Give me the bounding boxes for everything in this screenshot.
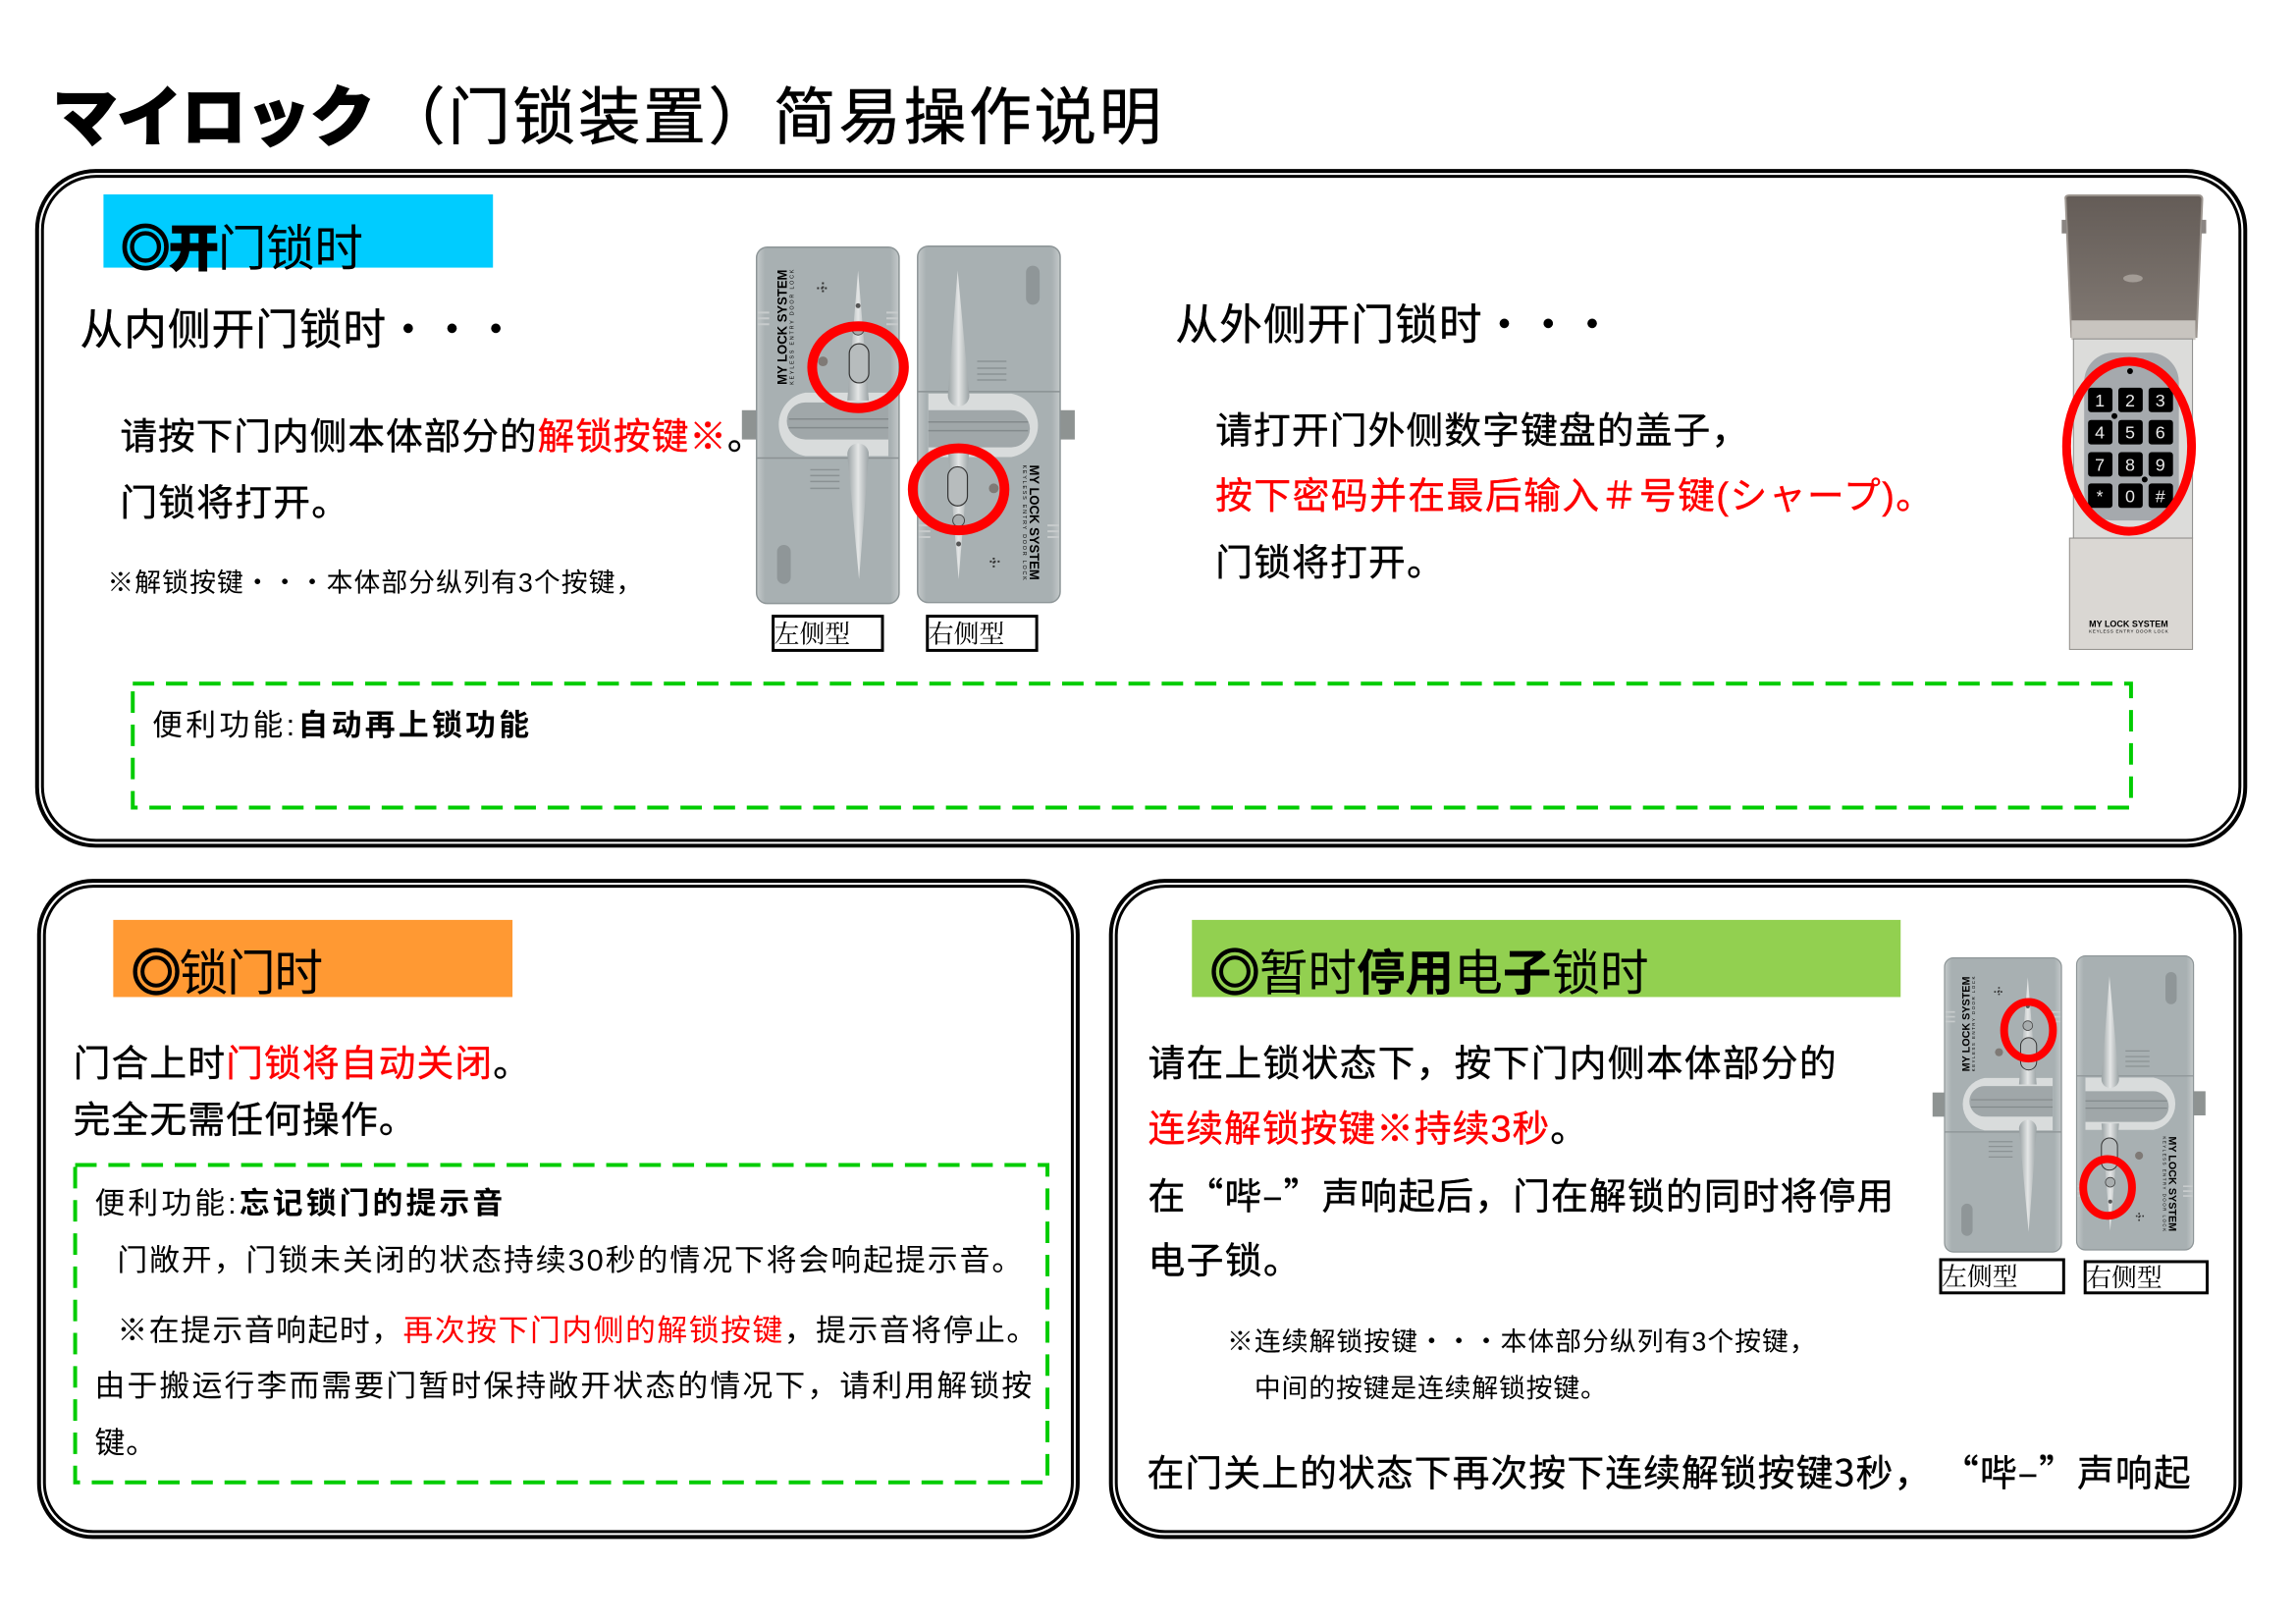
- keypad buttons: *: [2097, 486, 2104, 506]
- text: disable instructions: 电子锁。: [1148, 1241, 1301, 1282]
- callout: auto relock: [133, 683, 2131, 808]
- label: right type: 右侧型: [929, 620, 1004, 648]
- icon: right-hand lock: MY LOCK SYSTEM: [1027, 464, 1041, 580]
- icon: left-hand lock small: MY LOCK SYSTEM: [1960, 977, 1972, 1071]
- highlight: keypad: [2066, 361, 2192, 531]
- panel frame: [39, 881, 1078, 1537]
- highlight: right lock button: [913, 449, 1004, 530]
- label: right type small: 右侧型: [2086, 1264, 2163, 1292]
- title: （门锁装置）简易操作说明: [383, 82, 1161, 152]
- icon: keypad unit: MY LOCK SYSTEM: [2089, 620, 2168, 630]
- icon: right-hand lock small: MY LOCK SYSTEM: [2165, 1136, 2177, 1231]
- heading: lock: ◎锁门时: [132, 946, 323, 1001]
- panel frame: [37, 171, 2245, 845]
- callout: reminder tone: 由于搬运行李而需要门暂时保持敞开状态的情况下，请利用解锁按: [94, 1369, 1032, 1403]
- note: unlock key: ※解锁按键・・・本体部分纵列有3个按键，: [107, 568, 642, 598]
- icon: left-hand lock: KEYLESS ENTRY DOOR LOCK: [790, 269, 796, 385]
- keypad buttons: 9: [2156, 455, 2165, 474]
- icon: right-hand lock: KEYLESS ENTRY DOOR LOCK: [1021, 464, 1027, 580]
- heading: temporary disable: ◎暂时停用电子锁时: [1210, 946, 1649, 1001]
- heading: open: [103, 194, 493, 277]
- text: re-enable: 在门关上的状态下再次按下连续解锁按键3秒， “哔–”声响起: [1148, 1443, 2191, 1497]
- icon: left-hand lock: [742, 247, 899, 604]
- keypad buttons: [2088, 368, 2173, 508]
- panel frame: [1111, 881, 2240, 1537]
- note: continuous key: [1227, 1326, 1816, 1403]
- text: inside instructions: [120, 417, 765, 524]
- icon: keypad unit: KEYLESS ENTRY DOOR LOCK: [2089, 629, 2168, 634]
- title: マイロック: [53, 81, 375, 153]
- icon: right-hand lock: [918, 246, 1075, 603]
- text: outside instructions: 按下密码并在最后输入＃号键(シャープ)。: [1215, 476, 1933, 517]
- label: right type small: [2085, 1262, 2208, 1293]
- icon: right-hand lock small: [2077, 956, 2206, 1250]
- panel: locking: [39, 881, 1078, 1537]
- label: left type: [774, 617, 882, 650]
- text: disable instructions: 请在上锁状态下，按下门内侧本体部分的: [1148, 1044, 1837, 1085]
- keypad buttons: 3: [2156, 391, 2165, 410]
- text: auto lock: [74, 1044, 530, 1142]
- icon: keypad unit: [2061, 195, 2207, 649]
- highlight: left lock button: [812, 326, 904, 408]
- highlight: right small lock button: [2083, 1160, 2132, 1216]
- keypad buttons: 7: [2095, 455, 2105, 474]
- heading: open: ◎开门锁时: [121, 222, 363, 277]
- callout: reminder tone: 键。: [94, 1426, 156, 1460]
- label: left type small: 左侧型: [1942, 1263, 2018, 1291]
- label: right type: [928, 617, 1037, 650]
- heading: temporary disable: [1192, 920, 1900, 1001]
- text: disable instructions: [1148, 1044, 1894, 1282]
- text: inside instructions: 请按下门内侧本体部分的解锁按键※。: [120, 417, 765, 459]
- subheading: from outside: 从外侧开门锁时・・・: [1175, 301, 1614, 350]
- icon: left-hand lock: MY LOCK SYSTEM: [775, 270, 790, 385]
- callout: reminder tone: [76, 1165, 1047, 1483]
- note: continuous key: 中间的按键是连续解锁按键。: [1255, 1374, 1607, 1403]
- text: outside instructions: 门锁将打开。: [1215, 543, 1444, 584]
- text: inside instructions: 门锁将打开。: [120, 483, 348, 524]
- keypad buttons: #: [2156, 486, 2165, 506]
- callout: reminder tone: ※在提示音响起时，再次按下门内侧的解锁按键，提示音将停止。: [117, 1314, 1037, 1348]
- subheading: from inside: 从内侧开门锁时・・・: [80, 306, 517, 354]
- keypad buttons: 0: [2125, 486, 2135, 506]
- title: [53, 81, 1161, 153]
- callout: reminder tone: 便利功能:忘记锁门的提示音: [94, 1186, 503, 1220]
- text: auto lock: 门合上时门锁将自动关闭。: [74, 1044, 530, 1085]
- keypad buttons: 1: [2095, 391, 2105, 410]
- label: left type: 左侧型: [774, 620, 850, 648]
- keypad buttons: 6: [2156, 423, 2165, 443]
- text: disable instructions: 在“哔–”声响起后，门在解锁的同时将停用: [1148, 1165, 1894, 1219]
- text: outside instructions: 请打开门外侧数字键盘的盖子，: [1215, 411, 1748, 453]
- text: auto lock: 完全无需任何操作。: [74, 1101, 416, 1142]
- icon: right-hand lock small: KEYLESS ENTRY DOOR LOCK: [2163, 1136, 2167, 1231]
- callout: reminder tone: 门敞开，门锁未关闭的状态持续30秒的情况下将会响起提示音。: [117, 1243, 1022, 1277]
- keypad buttons: 5: [2125, 423, 2135, 443]
- keypad buttons: 2: [2125, 391, 2135, 410]
- text: outside instructions: [1215, 411, 1933, 584]
- label: left type small: [1941, 1260, 2063, 1293]
- heading: lock: [113, 920, 512, 1001]
- note: continuous key: ※连续解锁按键・・・本体部分纵列有3个按键，: [1227, 1326, 1816, 1356]
- panel: disabling electronic lock: [1111, 881, 2240, 1537]
- icon: left-hand lock small: KEYLESS ENTRY DOOR LOCK: [1971, 977, 1976, 1071]
- icon: left-hand lock small: [1933, 958, 2061, 1252]
- keypad buttons: 8: [2125, 455, 2135, 474]
- highlight: left small lock button: [2004, 1001, 2053, 1058]
- callout: auto relock: 便利功能:自动再上锁功能: [152, 708, 529, 742]
- text: disable instructions: 连续解锁按键※持续3秒。: [1148, 1110, 1587, 1151]
- keypad buttons: 4: [2095, 423, 2105, 443]
- panel: opening the lock: [37, 171, 2245, 845]
